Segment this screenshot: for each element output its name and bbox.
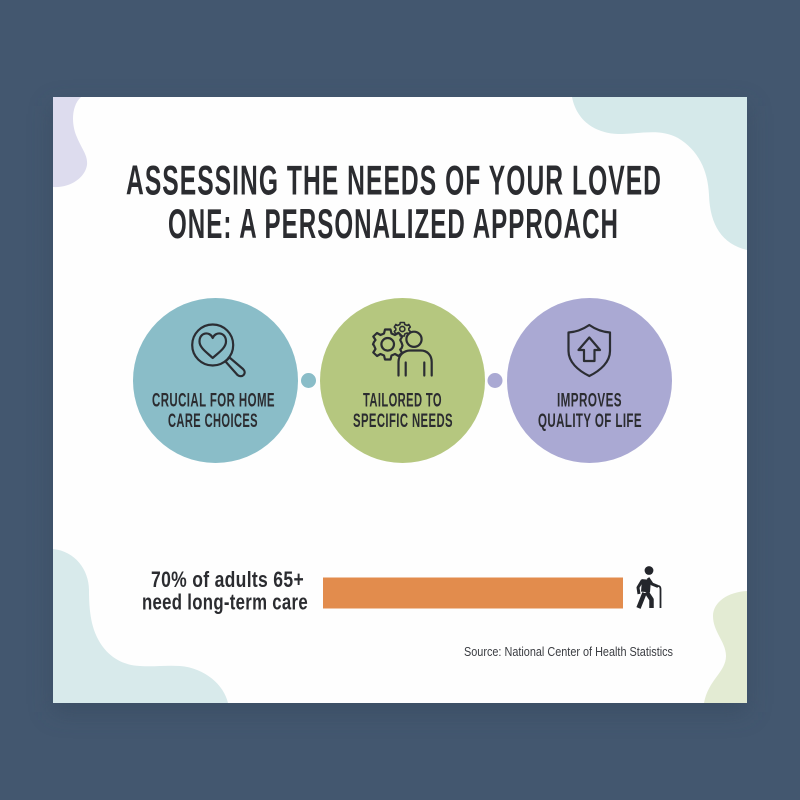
bar: 70 percent (323, 578, 623, 608)
icon: person with gears (373, 322, 432, 376)
label: SPECIFIC NEEDS (353, 410, 453, 432)
label: QUALITY OF LIFE (538, 410, 642, 432)
label (152, 390, 275, 432)
icon: shield with up arrow (568, 325, 610, 376)
label: CRUCIAL FOR HOME (152, 390, 275, 412)
icon: person walking with cane (638, 566, 660, 608)
source note: Source: National Center of Health Statistics (464, 645, 673, 659)
blob: bottom right green (704, 591, 747, 703)
panel: white card (53, 97, 747, 703)
connector dot: teal (301, 373, 316, 388)
panel: crucial for home care choices (133, 298, 298, 463)
blob: top left lavender (53, 97, 87, 187)
panel: tailored to specific needs (320, 298, 485, 463)
statistic text: need long-term care (142, 590, 308, 614)
blob: top right teal (572, 97, 747, 250)
label: TAILORED TO (363, 390, 442, 412)
label: CARE CHOICES (168, 410, 258, 432)
connector dot: purple (488, 373, 502, 388)
statistic text: 70% of adults 65+ (151, 567, 304, 592)
label: IMPROVES (557, 390, 622, 412)
label (538, 390, 642, 432)
icon: magnifier with heart (192, 324, 245, 376)
panel: improves quality of life (507, 298, 672, 463)
label (353, 390, 453, 432)
blob: bottom left teal (53, 549, 228, 703)
title (126, 156, 662, 247)
statistic text (142, 567, 308, 614)
